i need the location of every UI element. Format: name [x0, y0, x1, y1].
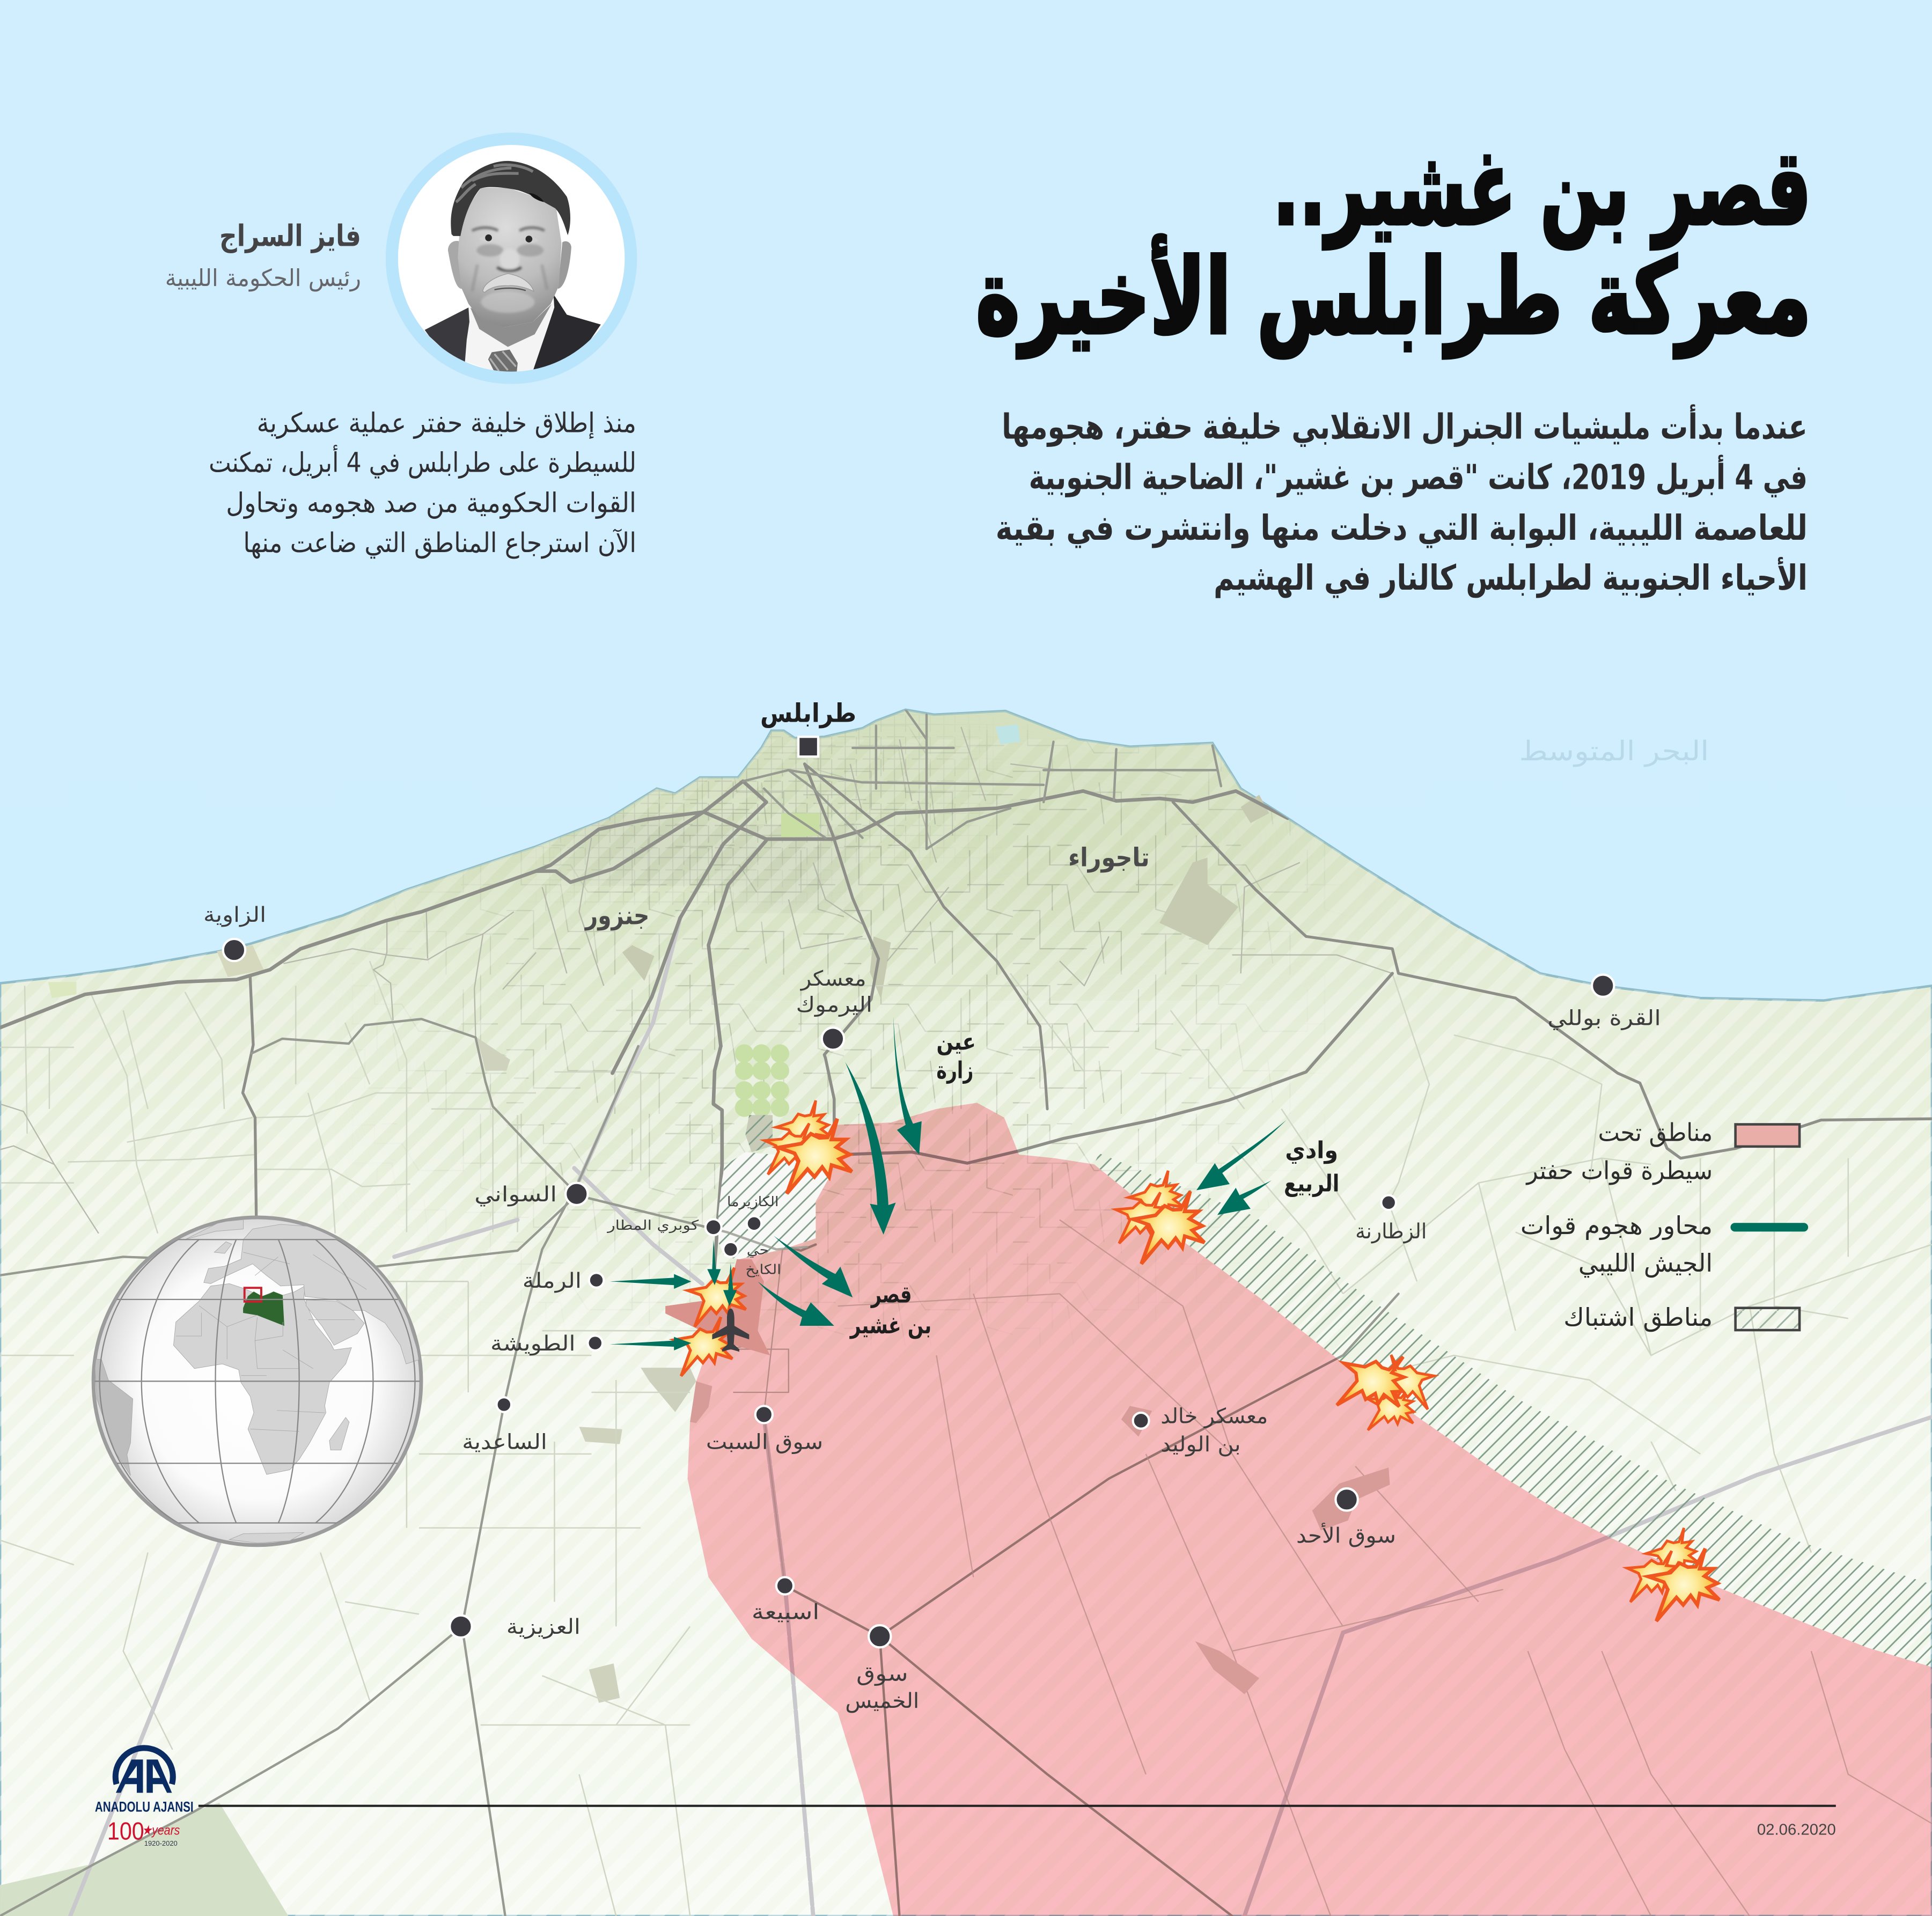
legend swatch: attack axes — [1735, 1225, 1804, 1229]
legend text: controlled area — [1525, 1118, 1713, 1186]
zone: clashes around the airport road — [577, 1115, 832, 1259]
logo: Anadolu Agency — [95, 1748, 194, 1847]
person title: رئيس الحكومة الليبية — [165, 265, 361, 292]
icon: airplane — [712, 1309, 749, 1352]
map: minor roads — [0, 727, 1932, 1916]
label: Souq al-Ahad: سوق الأحد — [1296, 1522, 1396, 1548]
map: main roads — [0, 710, 1932, 1916]
label: Ain Zara: زارة — [936, 1057, 973, 1084]
legend text: attack axes: الجيش الليبي — [1578, 1249, 1713, 1278]
label: Yarmouk camp: معسكر — [800, 967, 866, 991]
label: Zatarna: الزطارنة — [1355, 1220, 1427, 1244]
label: Tripoli: طرابلس — [760, 699, 856, 729]
logo: Anadolu Agency: 1920-2020 — [144, 1840, 178, 1847]
arrow: from Kobri al-Matar — [707, 1239, 721, 1285]
arrow: Yarmouk to Qasr bin Ghashir — [845, 1062, 896, 1235]
side paragraph: الآن استرجاع المناطق التي ضاعت منها — [243, 527, 636, 559]
label: Qasr bin Ghashir — [849, 1281, 931, 1339]
label: Airport bridge: كوبري المطار — [606, 1217, 699, 1234]
map: land-use patches — [0, 724, 1269, 1916]
label: Wadi Rabie: وادي — [1285, 1137, 1338, 1164]
legend text: controlled area: سيطرة قوات حفتر — [1525, 1156, 1713, 1186]
label: Yarmouk camp: اليرموك — [796, 993, 872, 1017]
label: Khalid bin al-Walid camp: معسكر خالد — [1160, 1404, 1268, 1428]
label: Saadiya: الساعدية — [462, 1430, 547, 1455]
legend swatch: controlled area — [1736, 1125, 1799, 1147]
arrow: from Hay al-Kayikh — [723, 1263, 737, 1306]
arrow: Ain Zara — [893, 1017, 922, 1155]
label: Isbia: اسبيعة — [752, 1601, 819, 1625]
label: Zawiya: الزاوية — [203, 903, 266, 927]
explosion: airport — [688, 1268, 746, 1327]
footer rule — [199, 1805, 1836, 1807]
map: base land and terrain — [0, 708, 1932, 1916]
label: Wadi Rabie — [1284, 1137, 1339, 1198]
explosion: south of airport — [674, 1317, 732, 1376]
label: Qasr bin Ghashir: بن غشير — [849, 1312, 931, 1339]
legend swatch: clash area — [1736, 1308, 1799, 1330]
label: Hay al-Kayikh — [745, 1242, 781, 1278]
side paragraph — [209, 407, 636, 559]
arrow: airport road to Qasr bin Ghashir — [774, 1236, 853, 1297]
label: Souq al-Sabt: سوق السبت — [706, 1430, 823, 1455]
label: Aziziya: العزيزية — [506, 1615, 581, 1639]
label: Tuwaisha: الطويشة — [490, 1332, 576, 1356]
label: Hay al-Kayikh: الكايخ — [745, 1262, 781, 1278]
arrow: Wadi Rabie upper — [1196, 1120, 1287, 1190]
logo: Anadolu Agency: ANADOLU AJANSI — [95, 1798, 194, 1815]
side paragraph: القوات الحكومية من صد هجومه وتحاول — [226, 487, 636, 519]
label: Ain Zara — [936, 1029, 976, 1084]
map: railway lines — [70, 918, 1932, 1916]
legend text: controlled area: مناطق تحت — [1598, 1118, 1713, 1148]
arrow: Wadi Rabie lower — [1217, 1180, 1272, 1215]
label: Qarabulli: القرة بوللي — [1547, 1007, 1661, 1031]
intro paragraph: الأحياء الجنوبية لطرابلس كالنار في الهشيم — [1214, 557, 1808, 598]
marker: Tripoli square — [798, 737, 818, 757]
label: Qasr bin Ghashir: قصر — [870, 1281, 912, 1308]
label: Ramla: الرملة — [523, 1269, 582, 1293]
date: 02.06.2020 — [1757, 1821, 1836, 1838]
label: Tajoura: تاجوراء — [1068, 842, 1150, 872]
logo: Anadolu Agency: ★years — [142, 1823, 180, 1838]
label: Yarmouk camp — [796, 967, 872, 1017]
label: Khalid bin al-Walid camp: بن الوليد — [1160, 1433, 1241, 1457]
label: Hay al-Kayikh: حي — [747, 1242, 769, 1258]
label: Souq al-Khamis: سوق — [856, 1662, 908, 1686]
title — [976, 128, 1811, 358]
portrait: Fayez al-Sarraj — [386, 133, 637, 384]
legend text: clash area: مناطق اشتباك — [1563, 1303, 1713, 1332]
marker dots: towns — [223, 939, 1614, 1647]
person name: فايز السراج — [219, 218, 361, 253]
map: light diagonal stripes — [0, 739, 1932, 1916]
label: Ain Zara: عين — [936, 1029, 976, 1056]
zone: brown built-up patches — [665, 1259, 1390, 1694]
label: Souq al-Khamis: الخميس — [845, 1689, 919, 1713]
intro paragraph: في 4 أبريل 2019، كانت "قصر بن غشير"، الضاحية الجنوبية — [1029, 455, 1808, 498]
locator globe — [86, 1217, 431, 1545]
intro paragraph — [996, 405, 1808, 598]
side paragraph: منذ إطلاق خليفة حفتر عملية عسكرية — [257, 407, 636, 439]
explosion cluster: airport road north — [762, 1099, 852, 1194]
side paragraph: للسيطرة على طرابلس في 4 أبريل، تمكنت — [209, 445, 636, 479]
label: Wadi Rabie: الربيع — [1284, 1171, 1339, 1198]
label: Souq al-Khamis — [845, 1662, 919, 1713]
explosion cluster: centre of front — [1329, 1339, 1434, 1437]
label: Janzour: جنزور — [584, 900, 649, 930]
label: Sawani: السواني — [474, 1183, 557, 1207]
legend text: attack axes: محاور هجوم قوات — [1520, 1211, 1713, 1240]
arrow: Ramla — [610, 1274, 691, 1289]
explosion cluster: Wadi Rabie — [1113, 1169, 1204, 1264]
legend text: attack axes — [1520, 1211, 1713, 1278]
zone: Haftar-controlled area — [687, 1103, 1932, 1916]
logo: Anadolu Agency: 100 — [107, 1817, 144, 1845]
arrow: Tuwaisha — [610, 1337, 691, 1350]
explosion cluster: southeast of front — [1624, 1526, 1720, 1621]
label: Kazirma: الكازيرما — [727, 1194, 778, 1210]
arrow: Kayikh to Qasr bin Ghashir — [758, 1281, 834, 1326]
label: Khalid bin al-Walid camp — [1160, 1404, 1268, 1457]
zone: clashes along the front — [1094, 1153, 1932, 1667]
legend — [1520, 1118, 1804, 1332]
label: Mediterranean sea: البحر المتوسط — [1519, 735, 1709, 767]
